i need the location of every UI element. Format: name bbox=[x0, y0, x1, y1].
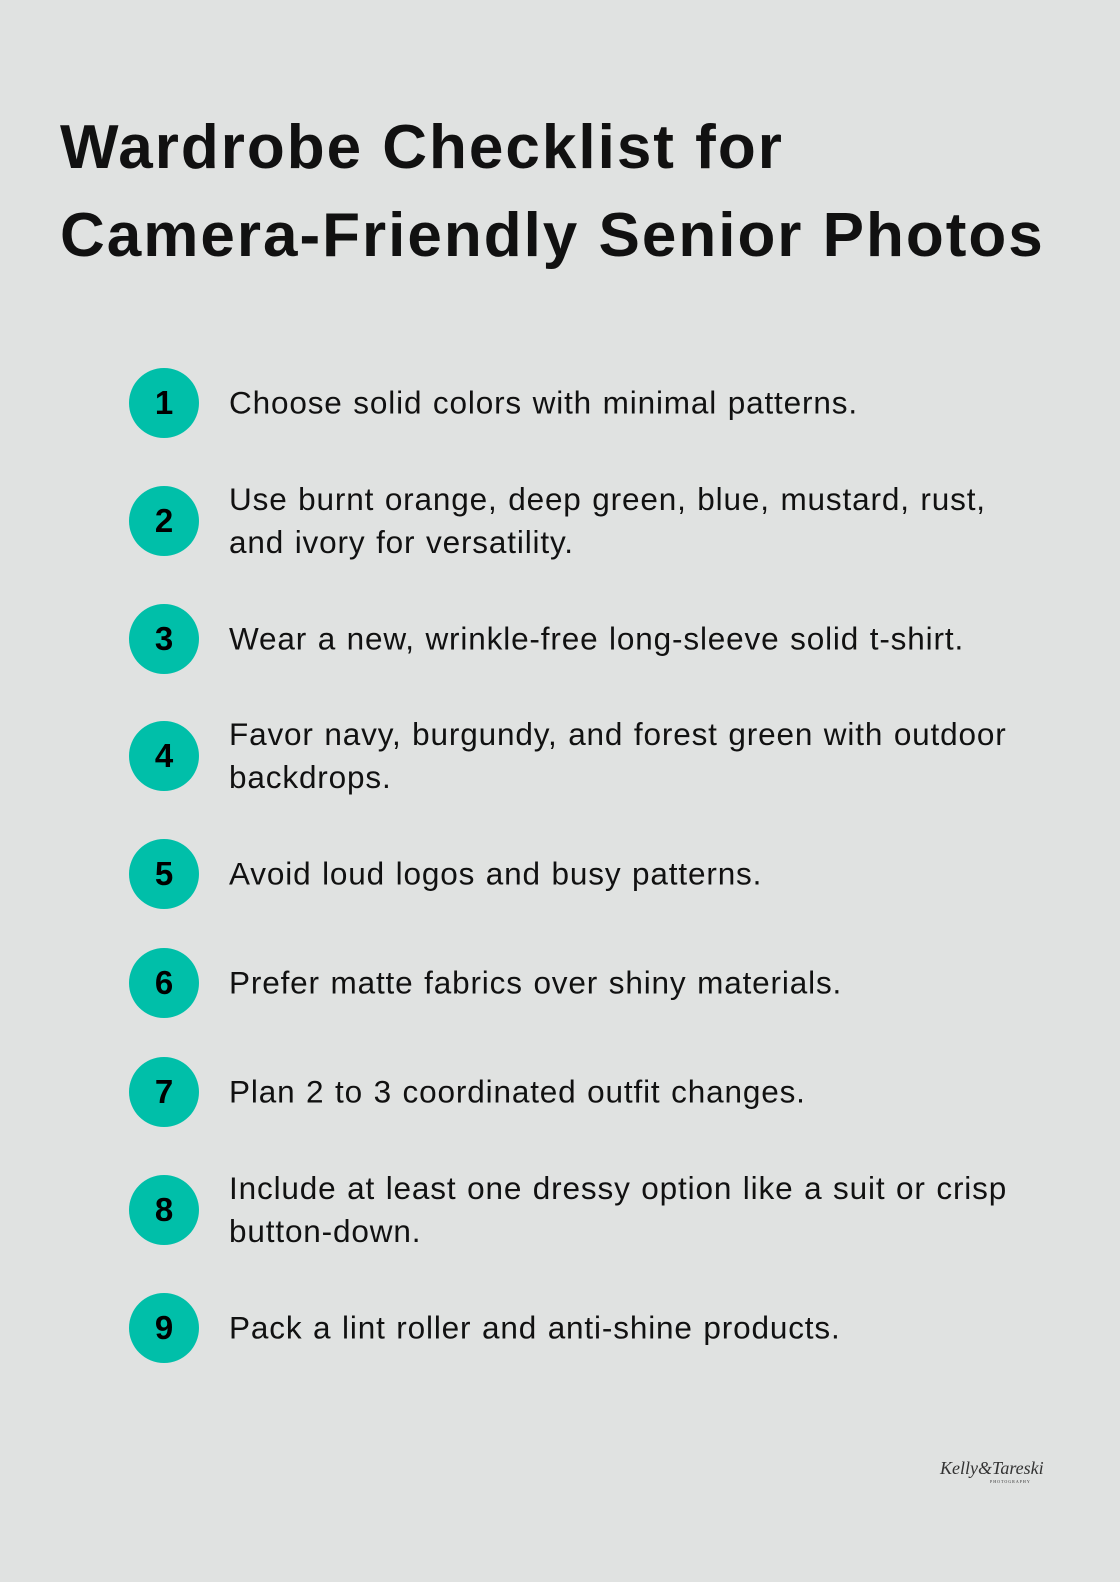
item 1: Choose solid colors with minimal patterns. bbox=[229, 384, 858, 420]
item 8 bbox=[129, 1170, 1007, 1249]
item 4: Favor navy, burgundy, and forest green with outdoor bbox=[229, 716, 1007, 752]
title: Camera-Friendly Senior Photos bbox=[60, 201, 1045, 270]
item 7: 7 bbox=[155, 1073, 173, 1110]
item 3: 3 bbox=[155, 620, 173, 657]
item 2: and ivory for versatility. bbox=[229, 524, 574, 560]
logo signature: PHOTOGRAPHY bbox=[990, 1479, 1031, 1484]
item 8: 8 bbox=[155, 1191, 173, 1228]
item 6: Prefer matte fabrics over shiny materials. bbox=[229, 964, 842, 1000]
item 9: Pack a lint roller and anti-shine products. bbox=[229, 1310, 841, 1346]
item 4 bbox=[129, 716, 1007, 795]
item 8: button-down. bbox=[229, 1213, 421, 1249]
item 5: Avoid loud logos and busy patterns. bbox=[229, 856, 762, 892]
item 9: 9 bbox=[155, 1309, 173, 1346]
item 7 bbox=[129, 1057, 806, 1127]
item 8: Include at least one dressy option like a suit or crisp bbox=[229, 1170, 1007, 1206]
item 2: Use burnt orange, deep green, blue, mustard, rust, bbox=[229, 481, 986, 517]
item 1: 1 bbox=[155, 384, 173, 421]
item 7: Plan 2 to 3 coordinated outfit changes. bbox=[229, 1074, 806, 1110]
item 6 bbox=[129, 948, 842, 1018]
item 5 bbox=[129, 839, 762, 909]
item 3 bbox=[129, 604, 964, 674]
title: Wardrobe Checklist for bbox=[60, 113, 784, 182]
logo signature: Kelly&Tareski bbox=[940, 1458, 1044, 1478]
item 1 bbox=[129, 368, 858, 438]
item 2: 2 bbox=[155, 502, 173, 539]
item 6: 6 bbox=[155, 964, 173, 1001]
item 2 bbox=[129, 481, 986, 560]
item 5: 5 bbox=[155, 855, 173, 892]
item 4: backdrops. bbox=[229, 759, 392, 795]
title bbox=[60, 113, 1045, 270]
item 9 bbox=[129, 1293, 841, 1363]
item 3: Wear a new, wrinkle-free long-sleeve solid t-shirt. bbox=[229, 620, 964, 656]
item 4: 4 bbox=[155, 737, 173, 774]
